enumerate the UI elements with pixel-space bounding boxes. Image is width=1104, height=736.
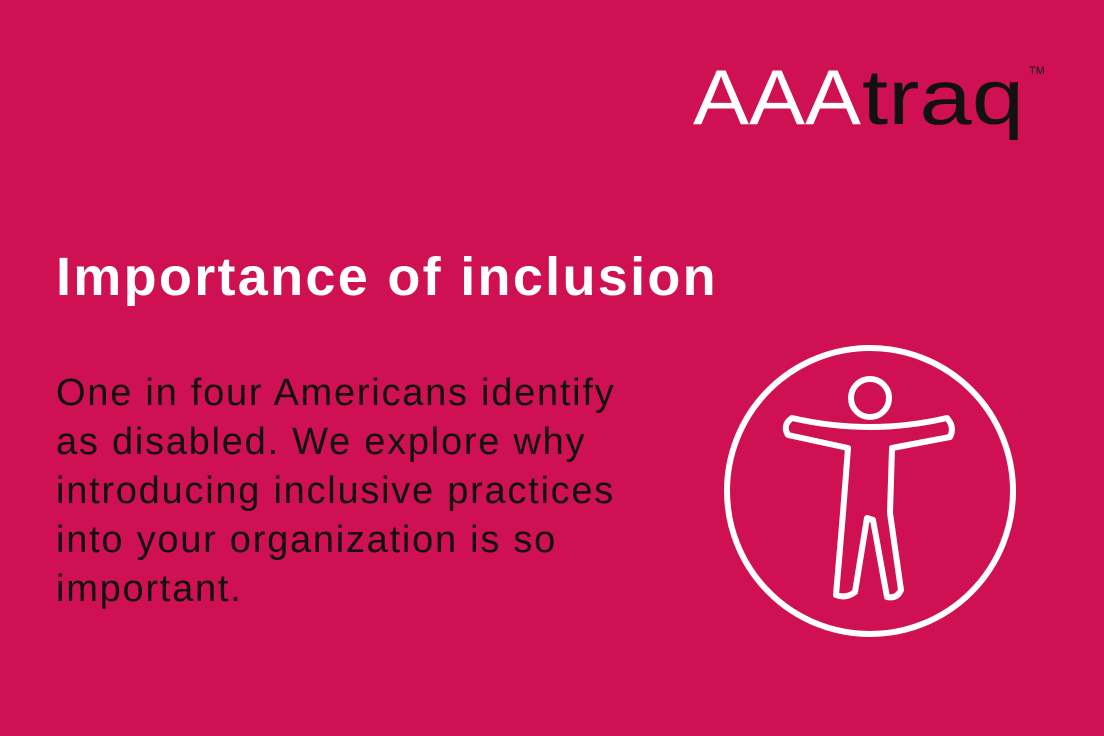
title: Importance of inclusion	[56, 247, 718, 307]
logo: AAA	[693, 53, 861, 141]
logo	[693, 53, 1045, 141]
body text: introducing inclusive practices	[56, 470, 615, 512]
body text: as disabled. We explore why	[56, 421, 586, 463]
logo: traq	[862, 53, 1024, 141]
icon: accessibility figure in circle	[724, 345, 1016, 637]
body text	[56, 372, 615, 610]
body text: into your organization is so	[56, 519, 557, 561]
body text: important.	[56, 568, 242, 610]
body text: One in four Americans identify	[56, 372, 615, 414]
logo: TM	[1029, 65, 1045, 77]
